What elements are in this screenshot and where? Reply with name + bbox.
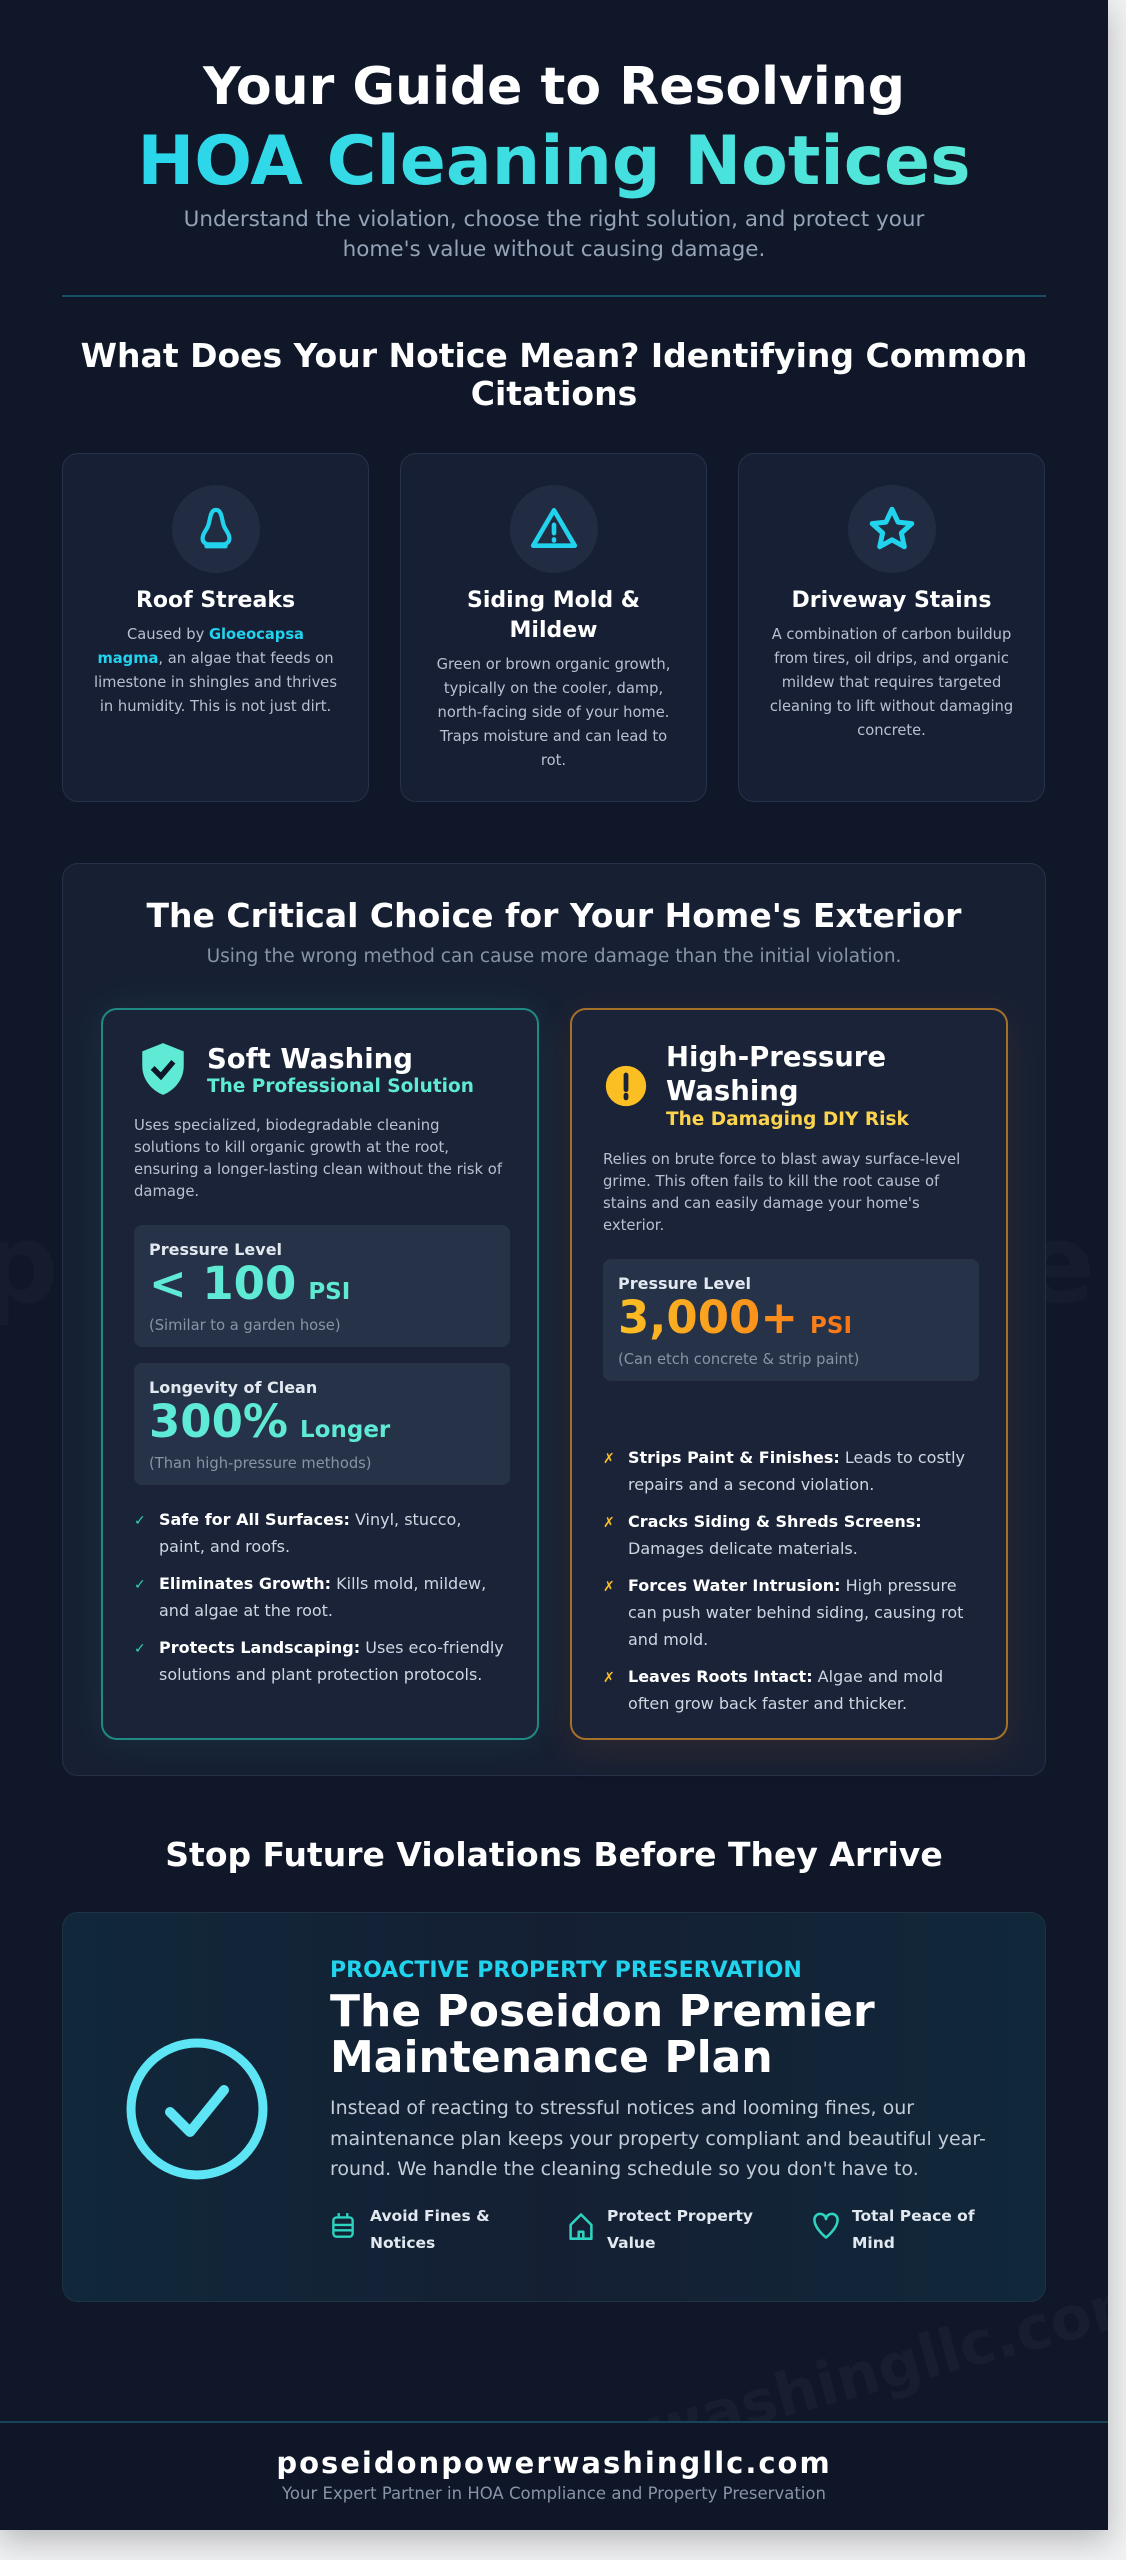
card: roof streaks: Roof Streaks xyxy=(136,588,295,613)
title: high pressure xyxy=(666,1041,886,1107)
stat: pressure: 3,000+ PSI xyxy=(618,1291,852,1344)
stat: pressure: (Can etch concrete & strip paint) xyxy=(618,1351,859,1368)
title: Your Guide to Resolving xyxy=(203,57,905,117)
risks list: ✗ xyxy=(603,1670,615,1686)
footer xyxy=(0,2421,1108,2530)
footer: poseidonpowerwashingllc.com xyxy=(276,2446,832,2480)
icon: shield xyxy=(142,1043,184,1095)
plan title: The Poseidon Premier xyxy=(330,1986,875,2037)
plan description: Instead of reacting to stressful notices and looming fines, our maintenance plan keeps your property compliant and beautiful year-round. We handle the cleaning schedule so you don't have to. xyxy=(330,2097,986,2180)
title: HOA Cleaning Notices xyxy=(137,122,971,201)
benefits list: Eliminates Growth: Kills mold, mildew, and algae at the root. xyxy=(159,1574,486,1620)
panel: high-pressure washing: The Damaging DIY Risk xyxy=(666,1109,909,1130)
card: siding mold: Siding Mold & xyxy=(467,588,640,613)
stat: pressure: < 100 PSI xyxy=(149,1257,350,1310)
risks list xyxy=(603,1448,965,1713)
stat: pressure: Pressure Level xyxy=(618,1274,751,1293)
panel: soft washing: The Professional Solution xyxy=(207,1076,474,1097)
benefits list xyxy=(134,1510,504,1684)
subtitle: Understand the violation, choose the right solution, and protect your home's value without causing damage. xyxy=(184,207,924,262)
benefits list: ✓ xyxy=(134,1513,146,1529)
feature: protect value xyxy=(569,2207,753,2252)
title: high pressure: High-Pressure xyxy=(666,1041,886,1073)
heading: stop future violations: Stop Future Violations Before They Arrive xyxy=(165,1835,943,1874)
title: high pressure: Washing xyxy=(666,1075,799,1107)
card: siding mold xyxy=(400,453,707,802)
icon: alert xyxy=(606,1066,646,1106)
feature: peace of mind xyxy=(813,2207,975,2252)
card: driveway stains: A combination of carbon buildup from tires, oil drips, and organic mildew that requires targeted cleaning to lift without damaging concrete. xyxy=(770,626,1013,739)
eyebrow: PROACTIVE PROPERTY PRESERVATION xyxy=(330,1958,802,1983)
panel: soft washing xyxy=(101,1008,539,1740)
stat: longevity: Longevity of Clean xyxy=(149,1378,317,1397)
benefits list: ✓ xyxy=(134,1577,146,1593)
title: soft washing: Soft Washing xyxy=(207,1043,413,1075)
heading: identifying citations: What Does Your Notice Mean? Identifying Common Citations xyxy=(81,336,1027,413)
stat: longevity: (Than high-pressure methods) xyxy=(149,1455,372,1472)
feature: protect value: Value xyxy=(607,2234,655,2252)
benefits list: Protects Landscaping: Uses eco-friendly solutions and plant protection protocols. xyxy=(159,1638,504,1684)
card: driveway stains xyxy=(738,453,1045,802)
risks list: ✗ xyxy=(603,1515,615,1531)
heading: critical choice: The Critical Choice for Your Home's Exterior xyxy=(147,896,961,935)
feature: peace of mind: Mind xyxy=(852,2234,895,2252)
feature: avoid fines: Notices xyxy=(370,2234,435,2252)
risks list: Cracks Siding & Shreds Screens: Damages delicate materials. xyxy=(628,1512,922,1558)
risks list: Forces Water Intrusion: High pressure can push water behind siding, causing rot and mold. xyxy=(628,1576,963,1649)
risks list: ✗ xyxy=(603,1451,615,1467)
card: driveway stains: Driveway Stains xyxy=(792,588,991,613)
stat: pressure: (Similar to a garden hose) xyxy=(149,1317,341,1334)
panel: high-pressure washing xyxy=(570,1008,1008,1740)
panel: critical choice xyxy=(62,863,1046,1776)
icon: warning xyxy=(510,485,598,573)
panel: maintenance plan xyxy=(62,1912,1046,2302)
stat: longevity xyxy=(134,1363,510,1485)
icon: star xyxy=(848,485,936,573)
plan title xyxy=(330,1986,875,2083)
stat: pressure xyxy=(603,1259,979,1381)
stat: pressure: Pressure Level xyxy=(149,1240,282,1259)
card: roof streaks: Caused by Gloeocapsa magma, an algae that feeds on limestone in shingles and thrives in humidity. This is not just dirt. xyxy=(94,626,337,715)
icon: roof drop xyxy=(172,485,260,573)
plan title: Maintenance Plan xyxy=(330,2032,773,2083)
feature: avoid fines: Avoid Fines & xyxy=(370,2207,490,2225)
benefits list: ✓ xyxy=(134,1641,146,1657)
card: siding mold: Green or brown organic growth, typically on the cooler, damp, north-facing side of your home. Traps moisture and can lead to rot. xyxy=(437,656,670,769)
risks list: Strips Paint & Finishes: Leads to costly repairs and a second violation. xyxy=(628,1448,965,1494)
feature: protect value: Protect Property xyxy=(607,2207,753,2225)
feature: avoid fines xyxy=(332,2207,490,2252)
stat: longevity: 300% Longer xyxy=(149,1395,390,1448)
footer: Your Expert Partner in HOA Compliance and Property Preservation xyxy=(282,2484,826,2503)
title xyxy=(137,57,971,201)
icon: check circle xyxy=(126,2038,268,2180)
feature: peace of mind: Total Peace of xyxy=(852,2207,975,2225)
card: siding mold: Mildew xyxy=(510,618,597,643)
risks list: ✗ xyxy=(603,1579,615,1595)
stat: pressure xyxy=(134,1225,510,1347)
risks list: Leaves Roots Intact: Algae and mold often grow back faster and thicker. xyxy=(628,1667,943,1713)
subheading: Using the wrong method can cause more damage than the initial violation. xyxy=(207,946,901,967)
card: roof streaks xyxy=(62,453,369,802)
benefits list: Safe for All Surfaces: Vinyl, stucco, paint, and roofs. xyxy=(159,1510,461,1556)
description: Relies on brute force to blast away surface-level grime. This often fails to kill the root cause of stains and can easily damage your home's exterior. xyxy=(603,1151,960,1234)
description: Uses specialized, biodegradable cleaning solutions to kill organic growth at the root, ensuring a longer-lasting clean without the risk of damage. xyxy=(134,1117,502,1200)
